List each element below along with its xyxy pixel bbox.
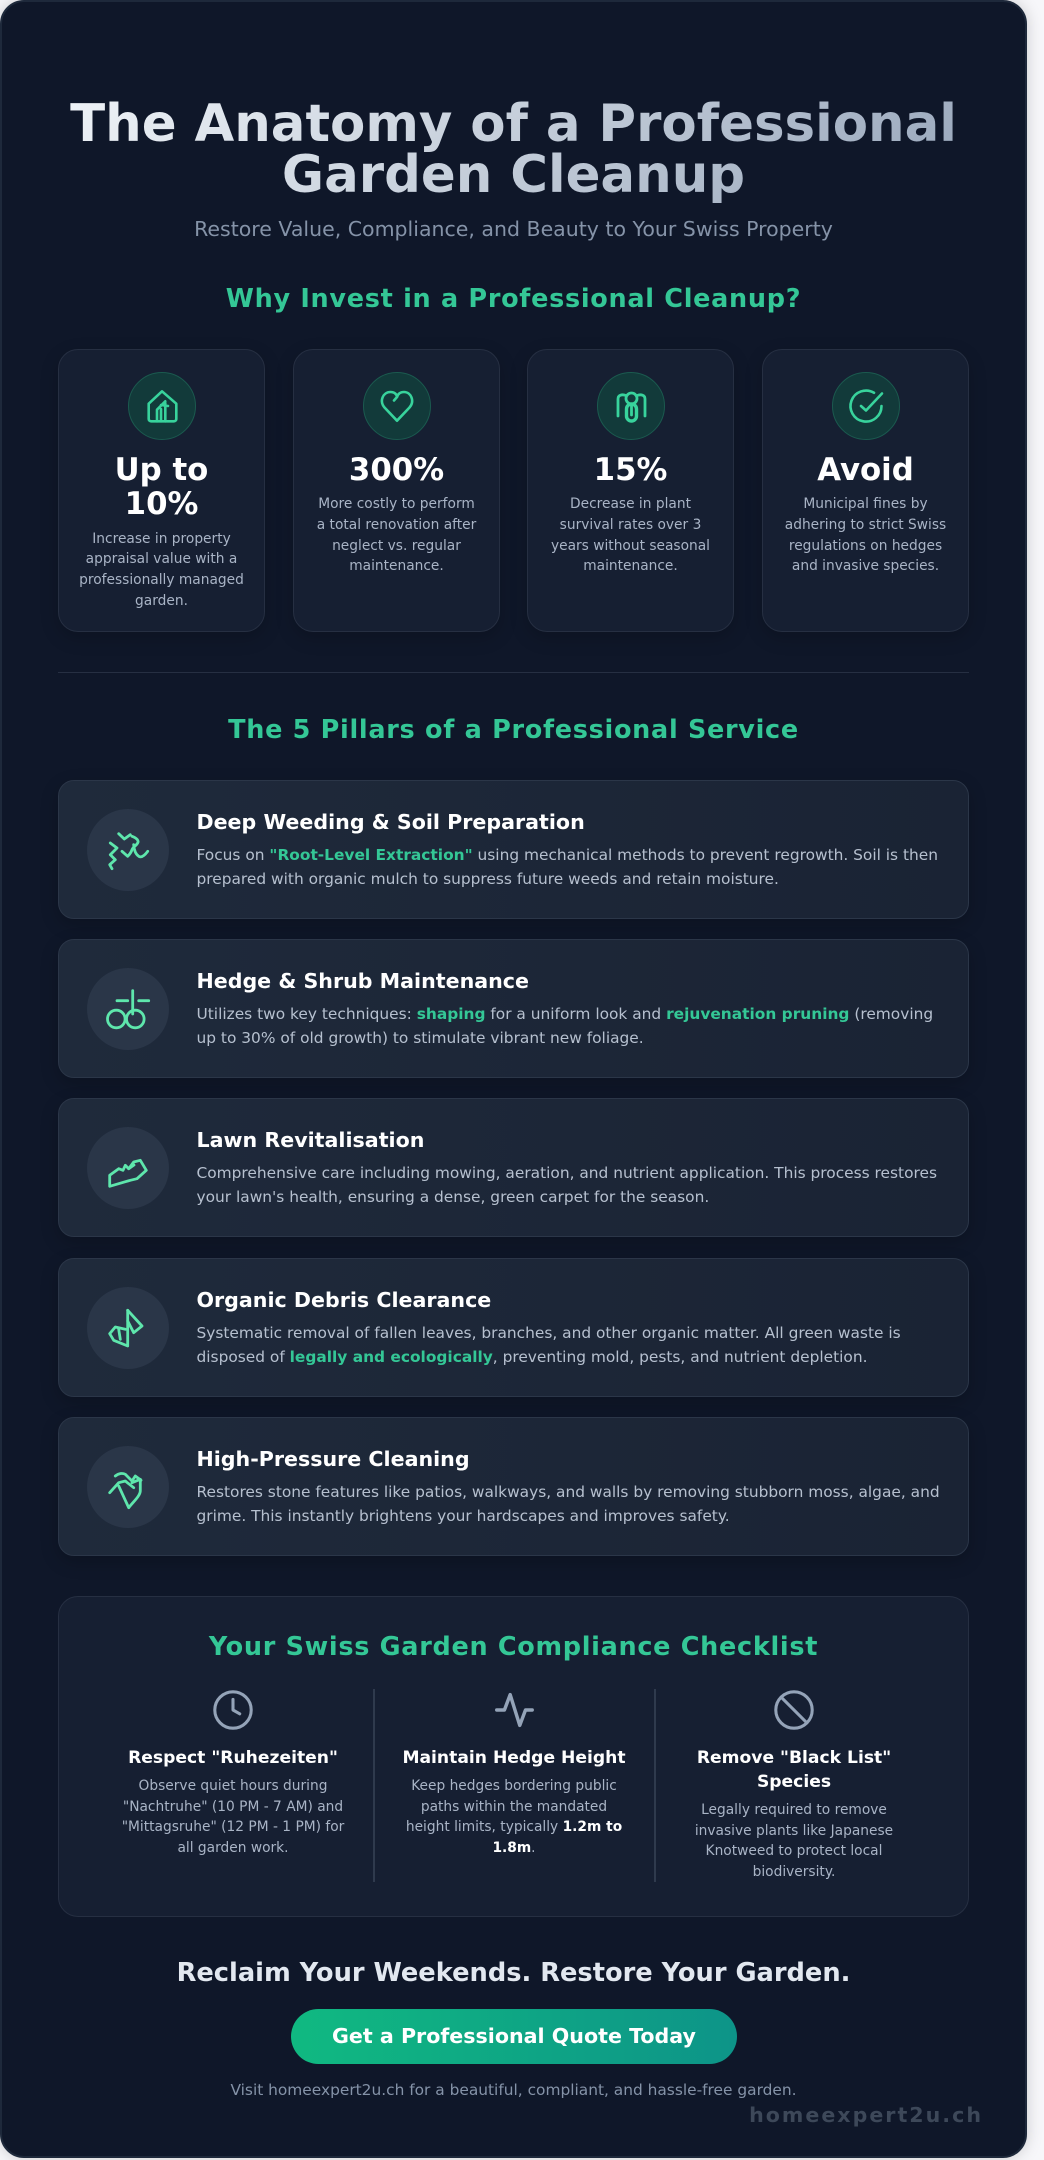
stat description: [785, 496, 946, 574]
stat description: Increase in property: [92, 531, 231, 547]
pillar description: up to 30% of old growth) to stimulate vibrant new foliage.: [196, 1029, 644, 1047]
pillar title: Organic Debris Clearance: [196, 1288, 491, 1312]
stat card: property value: [58, 349, 265, 632]
pillar description: Systematic removal of fallen leaves, branches, and other organic matter. All green waste is: [196, 1324, 901, 1342]
checklist item: hedge height: [402, 1692, 626, 1856]
button: quote: Get a Professional Quote Today: [332, 2024, 696, 2048]
icon: weeds: [87, 809, 169, 891]
item description: paths within the mandated: [421, 1799, 607, 1815]
button: quote: [291, 2009, 737, 2064]
item description: all garden work.: [177, 1840, 289, 1856]
stat description: [79, 531, 244, 609]
pillar description: your lawn's health, ensuring a dense, green carpet for the season.: [196, 1188, 709, 1206]
pillar: pressure cleaning: [58, 1417, 969, 1556]
icon: pulse: [495, 1692, 534, 1728]
item description: Legally required to remove: [701, 1802, 887, 1818]
pillar description: [196, 1483, 940, 1525]
item description: Observe quiet hours during: [139, 1778, 327, 1794]
stat description: [551, 496, 710, 574]
pillar description: grime. This instantly brightens your hardscapes and improves safety.: [196, 1507, 730, 1525]
stat description: [317, 496, 476, 574]
stat description: garden.: [135, 593, 188, 609]
pillar description: prepared with organic mulch to suppress future weeds and retain moisture.: [196, 870, 779, 888]
pillar description: Focus on "Root-Level Extraction" using mechanical methods to prevent regrowth. Soil is then: [196, 846, 938, 864]
stat value: 15%: [594, 452, 667, 488]
item title: Species: [757, 1772, 831, 1792]
icon: heart: [362, 372, 430, 440]
icon: prohibited: [774, 1690, 814, 1730]
heading: why invest: Why Invest in a Professional Cleanup?: [226, 284, 801, 314]
watermark: homeexpert2u.ch: [749, 2103, 983, 2127]
stat description: maintenance.: [583, 558, 678, 574]
stat description: regulations on hedges: [789, 538, 942, 554]
icon: mower: [87, 1127, 169, 1209]
icon: plants: [596, 372, 664, 440]
item title: Remove "Black List": [697, 1748, 891, 1768]
pillar: hedge: [58, 939, 969, 1078]
item description: [695, 1802, 893, 1880]
footer note: Visit homeexpert2u.ch for a beautiful, compliant, and hassle-free garden.: [230, 2081, 797, 2099]
stat description: appraisal value with a: [86, 551, 237, 567]
stat value: Up to: [115, 452, 208, 488]
item description: "Nachtruhe" (10 PM - 7 AM) and: [123, 1799, 343, 1815]
pillar title: Hedge & Shrub Maintenance: [196, 969, 529, 993]
icon: clock: [213, 1690, 253, 1730]
pillar title: Deep Weeding & Soil Preparation: [196, 810, 585, 834]
pillar description: [196, 1164, 937, 1206]
stat description: maintenance.: [349, 558, 444, 574]
stat description: a total renovation after: [317, 517, 476, 533]
pillar description: [196, 1324, 901, 1366]
panel: compliance checklist: [58, 1596, 969, 1917]
subtitle: Restore Value, Compliance, and Beauty to Your Swiss Property: [194, 217, 833, 241]
pillar: deep weeding: [58, 780, 969, 919]
stat card: plant survival: [527, 349, 734, 632]
heading: five pillars: The 5 Pillars of a Professional Service: [228, 715, 799, 745]
item description: Keep hedges bordering public: [411, 1778, 617, 1794]
pillar description: [196, 1005, 933, 1047]
stat value: [115, 452, 208, 522]
icon: drop: [87, 1446, 169, 1528]
item title: [697, 1748, 891, 1792]
item description: [406, 1778, 622, 1856]
pillar: lawn: [58, 1098, 969, 1237]
pillar description: Comprehensive care including mowing, aeration, and nutrient application. This process restores: [196, 1164, 937, 1182]
stat value: 300%: [349, 452, 444, 488]
item description: Knotweed to protect local: [706, 1843, 882, 1859]
stat description: neglect vs. regular: [332, 538, 461, 554]
icon: debris: [87, 1287, 169, 1369]
stat value: Avoid: [817, 452, 914, 488]
checklist item: quiet hours: [122, 1690, 344, 1856]
item description: biodiversity.: [753, 1864, 835, 1880]
stat description: adhering to strict Swiss: [785, 517, 946, 533]
pillar: debris: [58, 1258, 969, 1397]
checklist item: black list: [695, 1690, 893, 1880]
stat description: and invasive species.: [792, 558, 939, 574]
stat description: survival rates over 3: [560, 517, 701, 533]
pillar description: [196, 846, 938, 888]
stat card: fines: [762, 349, 969, 632]
item description: "Mittagsruhe" (12 PM - 1 PM) for: [122, 1819, 344, 1835]
heading: compliance checklist: Your Swiss Garden Compliance Checklist: [209, 1632, 818, 1662]
icon: shears: [87, 968, 169, 1050]
title: The Anatomy of a Professional: [70, 94, 957, 154]
stat description: Decrease in plant: [570, 496, 691, 512]
item description: height limits, typically 1.2m to: [406, 1819, 622, 1835]
stat description: Municipal fines by: [803, 496, 928, 512]
icon: house: [128, 372, 196, 440]
stat description: professionally managed: [79, 572, 244, 588]
pillar description: Utilizes two key techniques: shaping for a uniform look and rejuvenation pruning (removing: [196, 1005, 933, 1023]
stat card: renovation cost: [293, 349, 500, 632]
item title: Respect "Ruhezeiten": [128, 1748, 338, 1768]
icon: check circle: [832, 372, 900, 440]
title: [70, 94, 957, 205]
stat value: 10%: [125, 486, 198, 522]
pillar description: disposed of legally and ecologically, preventing mold, pests, and nutrient depletion.: [196, 1348, 867, 1366]
pillar description: Restores stone features like patios, walkways, and walls by removing stubborn moss, algae, and: [196, 1483, 940, 1501]
stat description: years without seasonal: [551, 538, 710, 554]
pillar title: Lawn Revitalisation: [196, 1128, 424, 1152]
stat description: More costly to perform: [318, 496, 475, 512]
item description: invasive plants like Japanese: [695, 1823, 893, 1839]
item title: Maintain Hedge Height: [402, 1748, 626, 1768]
title: Garden Cleanup: [282, 145, 745, 205]
call to action heading: Reclaim Your Weekends. Restore Your Garden.: [177, 1958, 850, 1988]
pillar title: High-Pressure Cleaning: [196, 1447, 470, 1471]
item description: 1.8m.: [492, 1840, 536, 1856]
item description: [122, 1778, 344, 1856]
